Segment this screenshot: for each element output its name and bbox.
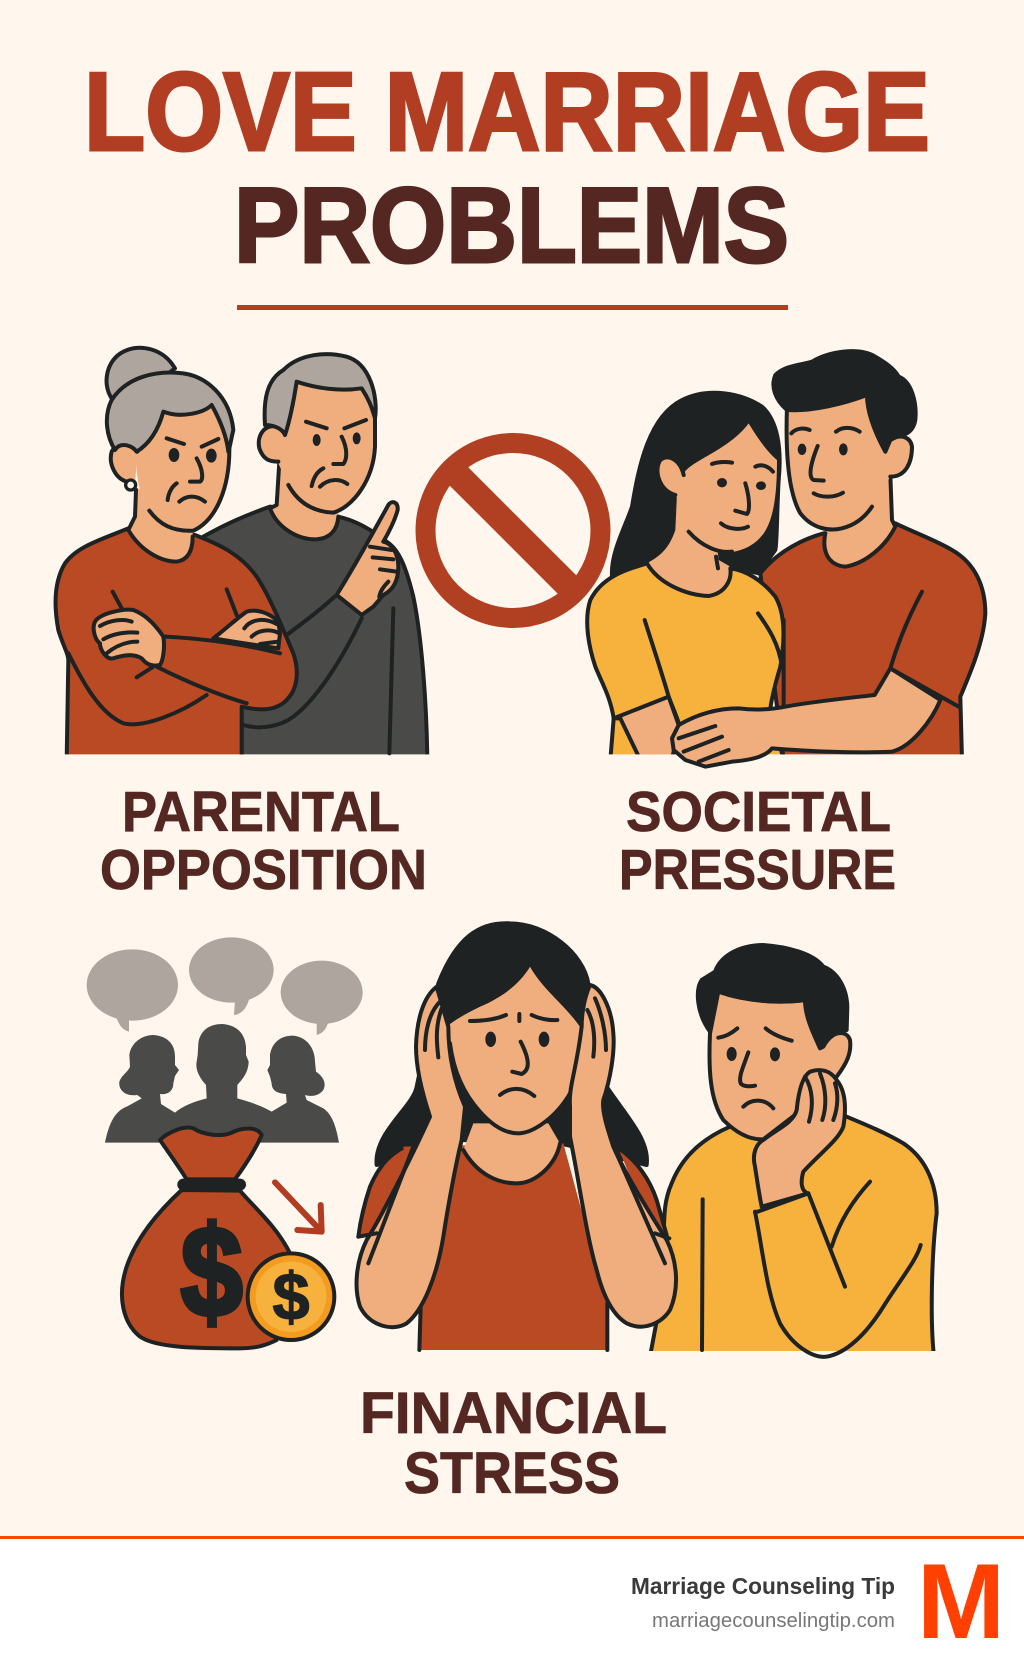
illustration: stressed woman and worried man <box>357 923 937 1357</box>
footer website: marriagecounselingtip.com <box>652 1610 895 1632</box>
embracing arm <box>672 668 959 767</box>
label: financial stress: STRESS <box>404 1441 620 1506</box>
footer logo: M <box>917 1541 1005 1661</box>
label: parental opposition: OPPOSITION <box>100 838 427 902</box>
label: financial stress: FINANCIAL <box>360 1381 667 1446</box>
label: societal pressure: PRESSURE <box>619 838 896 902</box>
coin <box>248 1253 334 1340</box>
illustration: couple under societal pressure <box>587 351 985 767</box>
label: financial stress <box>360 1381 667 1506</box>
title: PROBLEMS <box>234 165 789 285</box>
arrow <box>275 1182 322 1232</box>
stressed woman <box>358 923 667 1350</box>
icon: money bag with coin and down arrow <box>122 1128 334 1348</box>
worried man <box>650 945 937 1357</box>
footer brand name: Marriage Counseling Tip <box>631 1573 895 1599</box>
woman's arms <box>357 985 676 1327</box>
title <box>84 50 930 285</box>
young woman <box>587 393 784 760</box>
label: societal pressure: SOCIETAL <box>626 780 891 844</box>
icon: prohibition sign <box>426 443 600 618</box>
bag <box>122 1128 290 1348</box>
title: LOVE MARRIAGE <box>84 50 930 174</box>
mother <box>56 348 297 760</box>
label: parental opposition: PARENTAL <box>122 780 400 844</box>
label: parental opposition <box>100 780 427 902</box>
speech bubbles <box>87 937 363 1035</box>
silhouettes <box>105 1024 339 1143</box>
illustration: angry parents <box>56 348 427 760</box>
young man <box>760 351 985 760</box>
icon: gossiping crowd with speech bubbles <box>87 937 363 1143</box>
bag: $ <box>181 1201 243 1344</box>
coin: $ <box>272 1260 310 1334</box>
footer <box>0 1536 1024 1666</box>
label: societal pressure <box>619 780 896 902</box>
father <box>203 354 427 760</box>
